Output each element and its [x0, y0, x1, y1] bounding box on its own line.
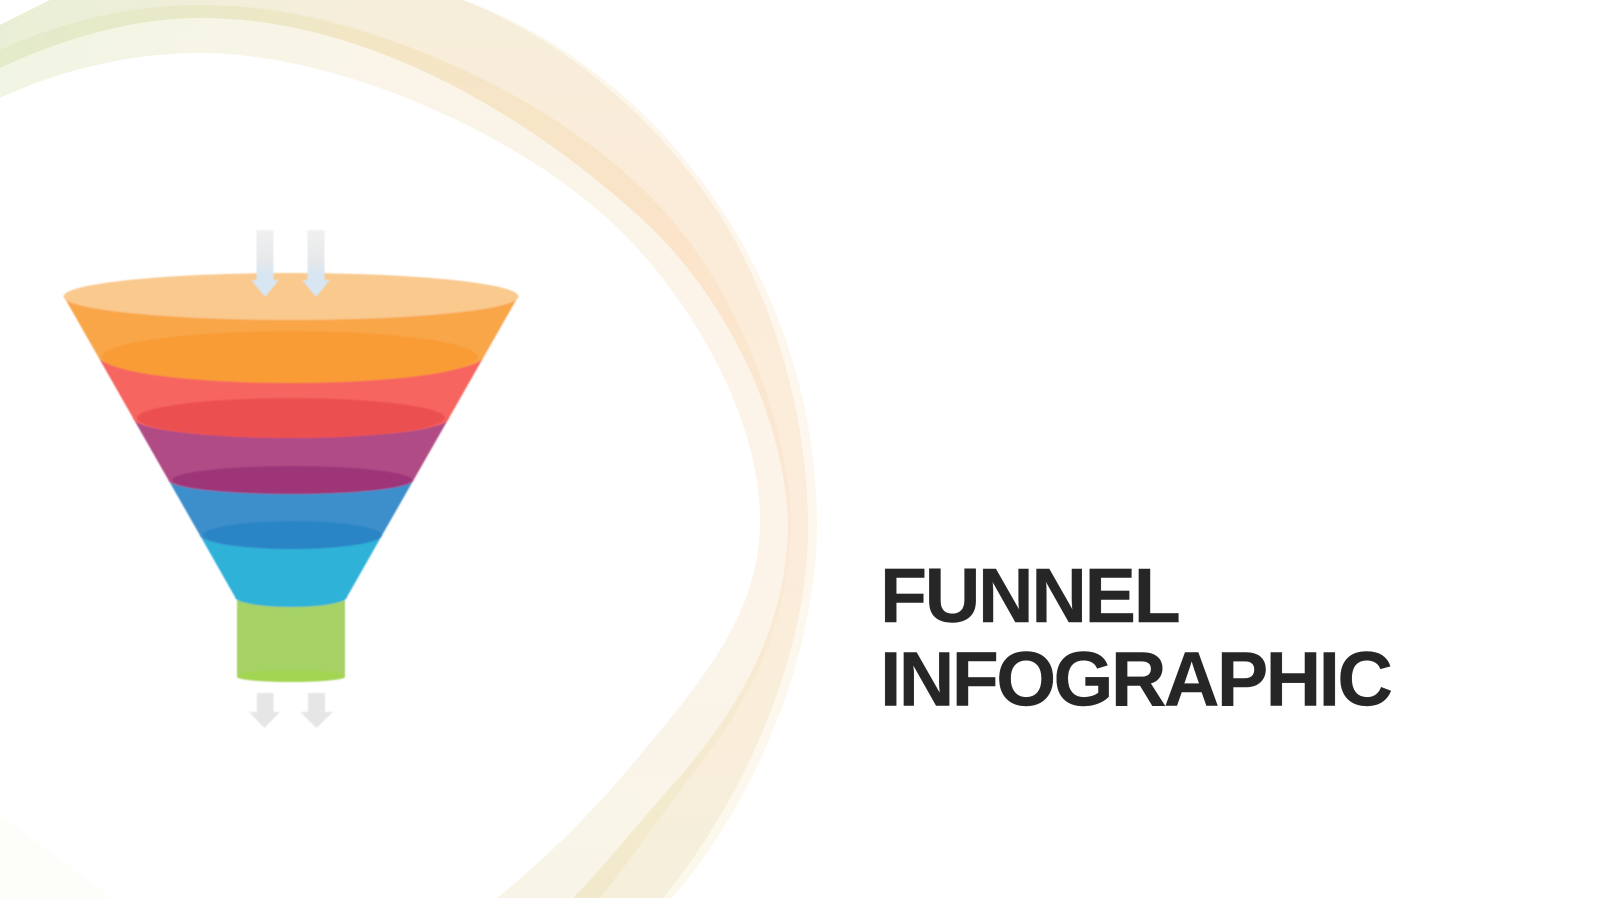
arrow out: right: [300, 693, 333, 728]
arrows: into funnel: [251, 230, 330, 297]
arrows: out of funnel: [249, 693, 333, 728]
funnel stem: green: [237, 596, 345, 682]
arrow in: right: [302, 230, 330, 297]
arrow out: left: [249, 693, 280, 728]
funnel segment: cyan: [200, 535, 382, 607]
arrow in: left: [251, 230, 279, 297]
title line 1: FUNNEL: [880, 553, 1179, 639]
title line 2: INFOGRAPHIC: [880, 636, 1391, 722]
funnel opening: top ellipse: [64, 273, 518, 320]
background ribbon swoosh: [0, 0, 817, 898]
title: [880, 553, 1391, 722]
funnel segment: blue: [168, 480, 414, 549]
funnel: [64, 273, 518, 682]
funnel segment: purple: [133, 418, 449, 494]
funnel segment: red: [98, 357, 484, 438]
funnel segment: orange: [64, 296, 518, 383]
